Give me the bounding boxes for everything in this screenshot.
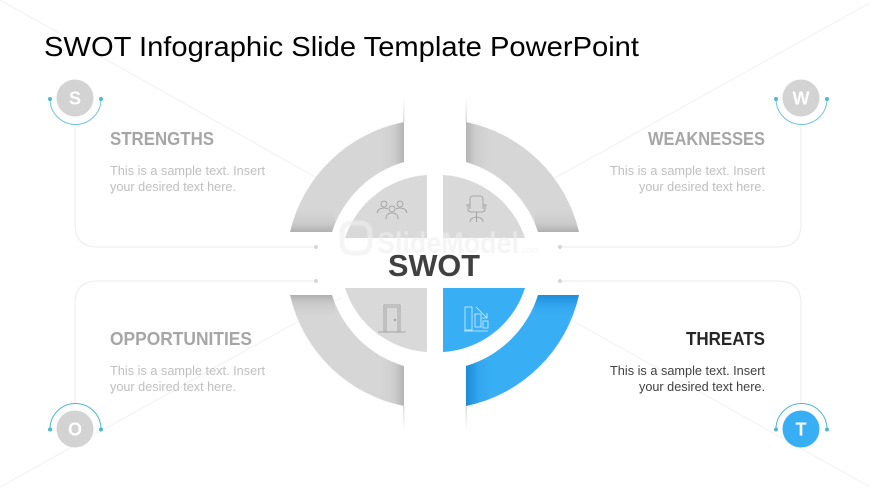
inner quadrant: strengths [345,175,427,238]
text block: threats: your desired text here. [639,380,765,394]
icon: door [378,305,406,332]
title: SWOT Infographic Slide Template PowerPoint [44,31,639,62]
watermark: SlideModel [377,227,519,260]
badge: T [774,404,829,448]
inner quadrant: opportunities [345,288,427,352]
text block: weaknesses [610,129,766,194]
panel outline: opportunities [75,281,316,404]
icon: office chair [466,196,487,222]
text block: threats [610,329,766,394]
ring segment: threats [466,295,579,406]
watermark: .com [520,245,538,255]
badge: T: T [796,420,806,440]
text block: weaknesses: WEAKNESSES [648,129,765,149]
inner quadrant: threats [443,288,525,352]
text block: weaknesses: This is a sample text. Insert [610,164,766,178]
panel outline: strengths [75,123,316,247]
connector dots [314,245,562,283]
ring segment: opportunities [290,295,404,406]
badge: W [774,80,829,124]
ring segment: strengths [290,122,404,232]
center label: SWOT [388,248,480,283]
badge: O: O [68,420,82,440]
vertical fading accents [403,97,467,431]
text block: opportunities: This is a sample text. Insert [110,364,266,378]
text block: opportunities: your desired text here. [110,380,236,394]
text block: weaknesses: your desired text here. [639,180,765,194]
text block: opportunities [110,329,266,394]
text block: strengths: STRENGTHS [110,129,214,149]
badge: O [48,404,103,448]
badge: S: S [69,88,81,108]
ring segment: weaknesses [466,122,579,232]
panel outline: weaknesses [560,123,801,247]
text block: strengths: your desired text here. [110,180,236,194]
inner quadrant: weaknesses [443,175,525,238]
text block: opportunities: OPPORTUNITIES [110,329,252,349]
text block: strengths: This is a sample text. Insert [110,164,266,178]
panel outline: threats [560,281,801,404]
badge: S [48,80,103,124]
text block: strengths [110,129,266,194]
icon: people [377,201,407,219]
text block: threats: THREATS [686,329,765,349]
text block: threats: This is a sample text. Insert [610,364,766,378]
icon: declining bar chart [464,307,488,331]
badge: W: W [792,88,810,108]
